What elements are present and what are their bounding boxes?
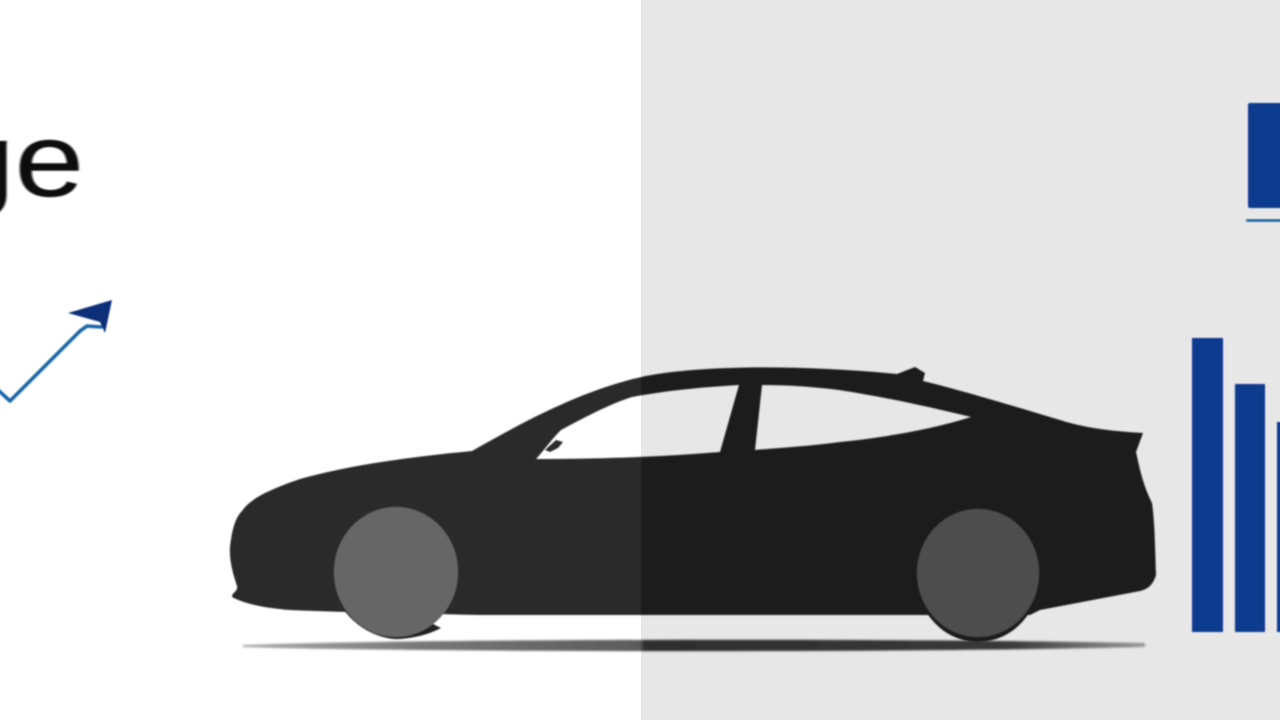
side mirror xyxy=(545,440,563,452)
bar chart xyxy=(1192,338,1280,632)
car body: left half xyxy=(228,376,642,616)
icon: rising trend arrow xyxy=(0,300,112,401)
blue block top right xyxy=(1248,103,1280,208)
car silhouette xyxy=(230,367,1156,642)
panel: right grey background xyxy=(641,0,1280,720)
bar 3 xyxy=(1277,422,1280,632)
blue underline xyxy=(1246,219,1280,222)
front wheel xyxy=(334,507,458,639)
car body: right half xyxy=(640,366,1157,616)
rear wheel xyxy=(916,508,1040,642)
ground shadow xyxy=(243,640,1145,651)
bar 1 xyxy=(1192,338,1223,632)
bar 2 xyxy=(1235,384,1265,632)
panel: left white background xyxy=(0,0,641,720)
